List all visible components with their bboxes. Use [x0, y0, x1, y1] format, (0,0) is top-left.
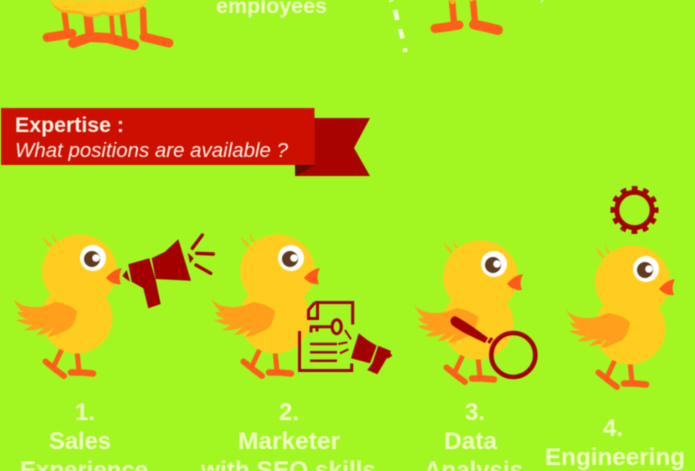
chick 1: sales: [13, 232, 122, 376]
label 2: marketer with SEO skills: [200, 399, 376, 471]
label 3: data analysis: [424, 399, 523, 471]
icon: magnifying glass: [451, 316, 535, 377]
chick 3: data analysis: [414, 238, 523, 382]
banner tail: [295, 118, 370, 176]
icon: megaphone: [122, 235, 213, 308]
icon: document with key and megaphone: [300, 302, 392, 374]
label 4: engineering: [545, 415, 685, 471]
banner heading: Expertise :: [15, 114, 124, 137]
chick feet (top centre right): [435, 0, 498, 30]
label 2: marketer with SEO skills: Marketer: [238, 428, 340, 455]
label 4: engineering: 4.: [603, 415, 623, 442]
label 1: sales experience: Sales: [49, 428, 111, 455]
chick 2: marketer: [211, 232, 320, 376]
chick 4: engineering: [566, 243, 675, 387]
banner fold: [295, 165, 315, 176]
label 3: data analysis: 3.: [465, 399, 485, 426]
banner: Expertise: [1, 108, 370, 176]
label 1: sales experience: 1.: [75, 399, 95, 426]
icon: gear: [613, 188, 656, 232]
dashed white line: [391, 0, 543, 52]
chick group feet (top left): [47, 0, 169, 45]
label 4: engineering: Engineering: [545, 444, 685, 471]
banner body: [1, 108, 314, 165]
label 1: sales experience: [20, 399, 148, 471]
banner subheading: What positions are available ?: [15, 139, 289, 162]
label 3: data analysis: Data: [444, 428, 498, 455]
label 2: marketer with SEO skills: 2.: [279, 399, 299, 426]
